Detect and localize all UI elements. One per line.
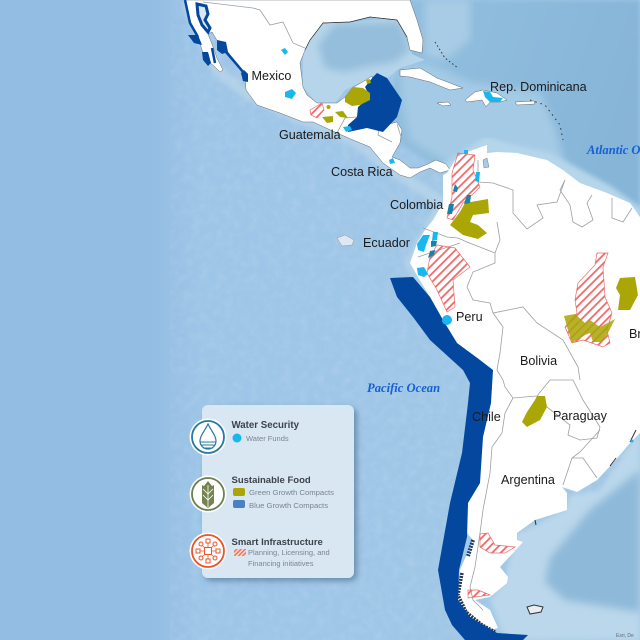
region: green growth compacts over hatch [564,314,615,343]
country labels: Rep. Dominicana [490,80,587,94]
legend: sustainable food: Sustainable Food [232,475,311,486]
country labels: Ecuador [363,236,410,250]
attribution: Esri, De [616,633,634,639]
region: planning and financing initiatives [310,103,612,598]
country labels: Guatemala [279,128,341,142]
hispaniola [465,90,507,107]
country labels: Colombia [390,198,443,212]
legend panel [190,405,354,578]
legend: smart infrastructure: Smart Infrastructure [232,537,323,548]
land: North and Central America [185,0,535,178]
legend: smart infrastructure: Planning, Licensing, and [248,548,330,557]
country labels [252,69,640,487]
lake maracaibo [483,158,489,168]
country labels: Bolivia [520,354,557,368]
icon: wheat [190,476,226,512]
legend: smart infrastructure: Financing initiatives [248,559,314,568]
legend: water security: Water Security [232,420,300,431]
legend: smart infrastructure [232,537,330,568]
legend: water security [232,420,300,443]
coastal shelf [186,0,493,370]
legend: water security: Water Funds [246,434,289,443]
country labels: Argentina [501,473,555,487]
country labels: Paraguay [553,409,608,423]
cuba [400,68,463,90]
icon: water drop [190,418,226,456]
legend: sustainable food: Green Growth Compacts [249,488,334,497]
Galapagos islands [337,235,354,246]
Falkland islands [527,605,543,614]
ocean labels: Pacific Ocean [367,381,440,395]
legend: sustainable food [232,475,334,510]
ocean labels: Atlantic O [586,143,640,157]
country labels: Mexico [252,69,291,83]
country borders [203,2,632,610]
country labels: Peru [456,310,483,324]
region: water funds [281,48,634,442]
dark coast detail [305,17,636,632]
region: green growth compacts [322,79,638,427]
icon: infrastructure network [190,532,226,570]
ocean labels [367,143,640,395]
region: blue growth compacts [185,0,528,640]
legend: sustainable food: Blue Growth Compacts [249,501,328,510]
country labels: Costa Rica [331,165,393,179]
country labels: Chile [472,410,501,424]
land: South America [410,145,640,630]
